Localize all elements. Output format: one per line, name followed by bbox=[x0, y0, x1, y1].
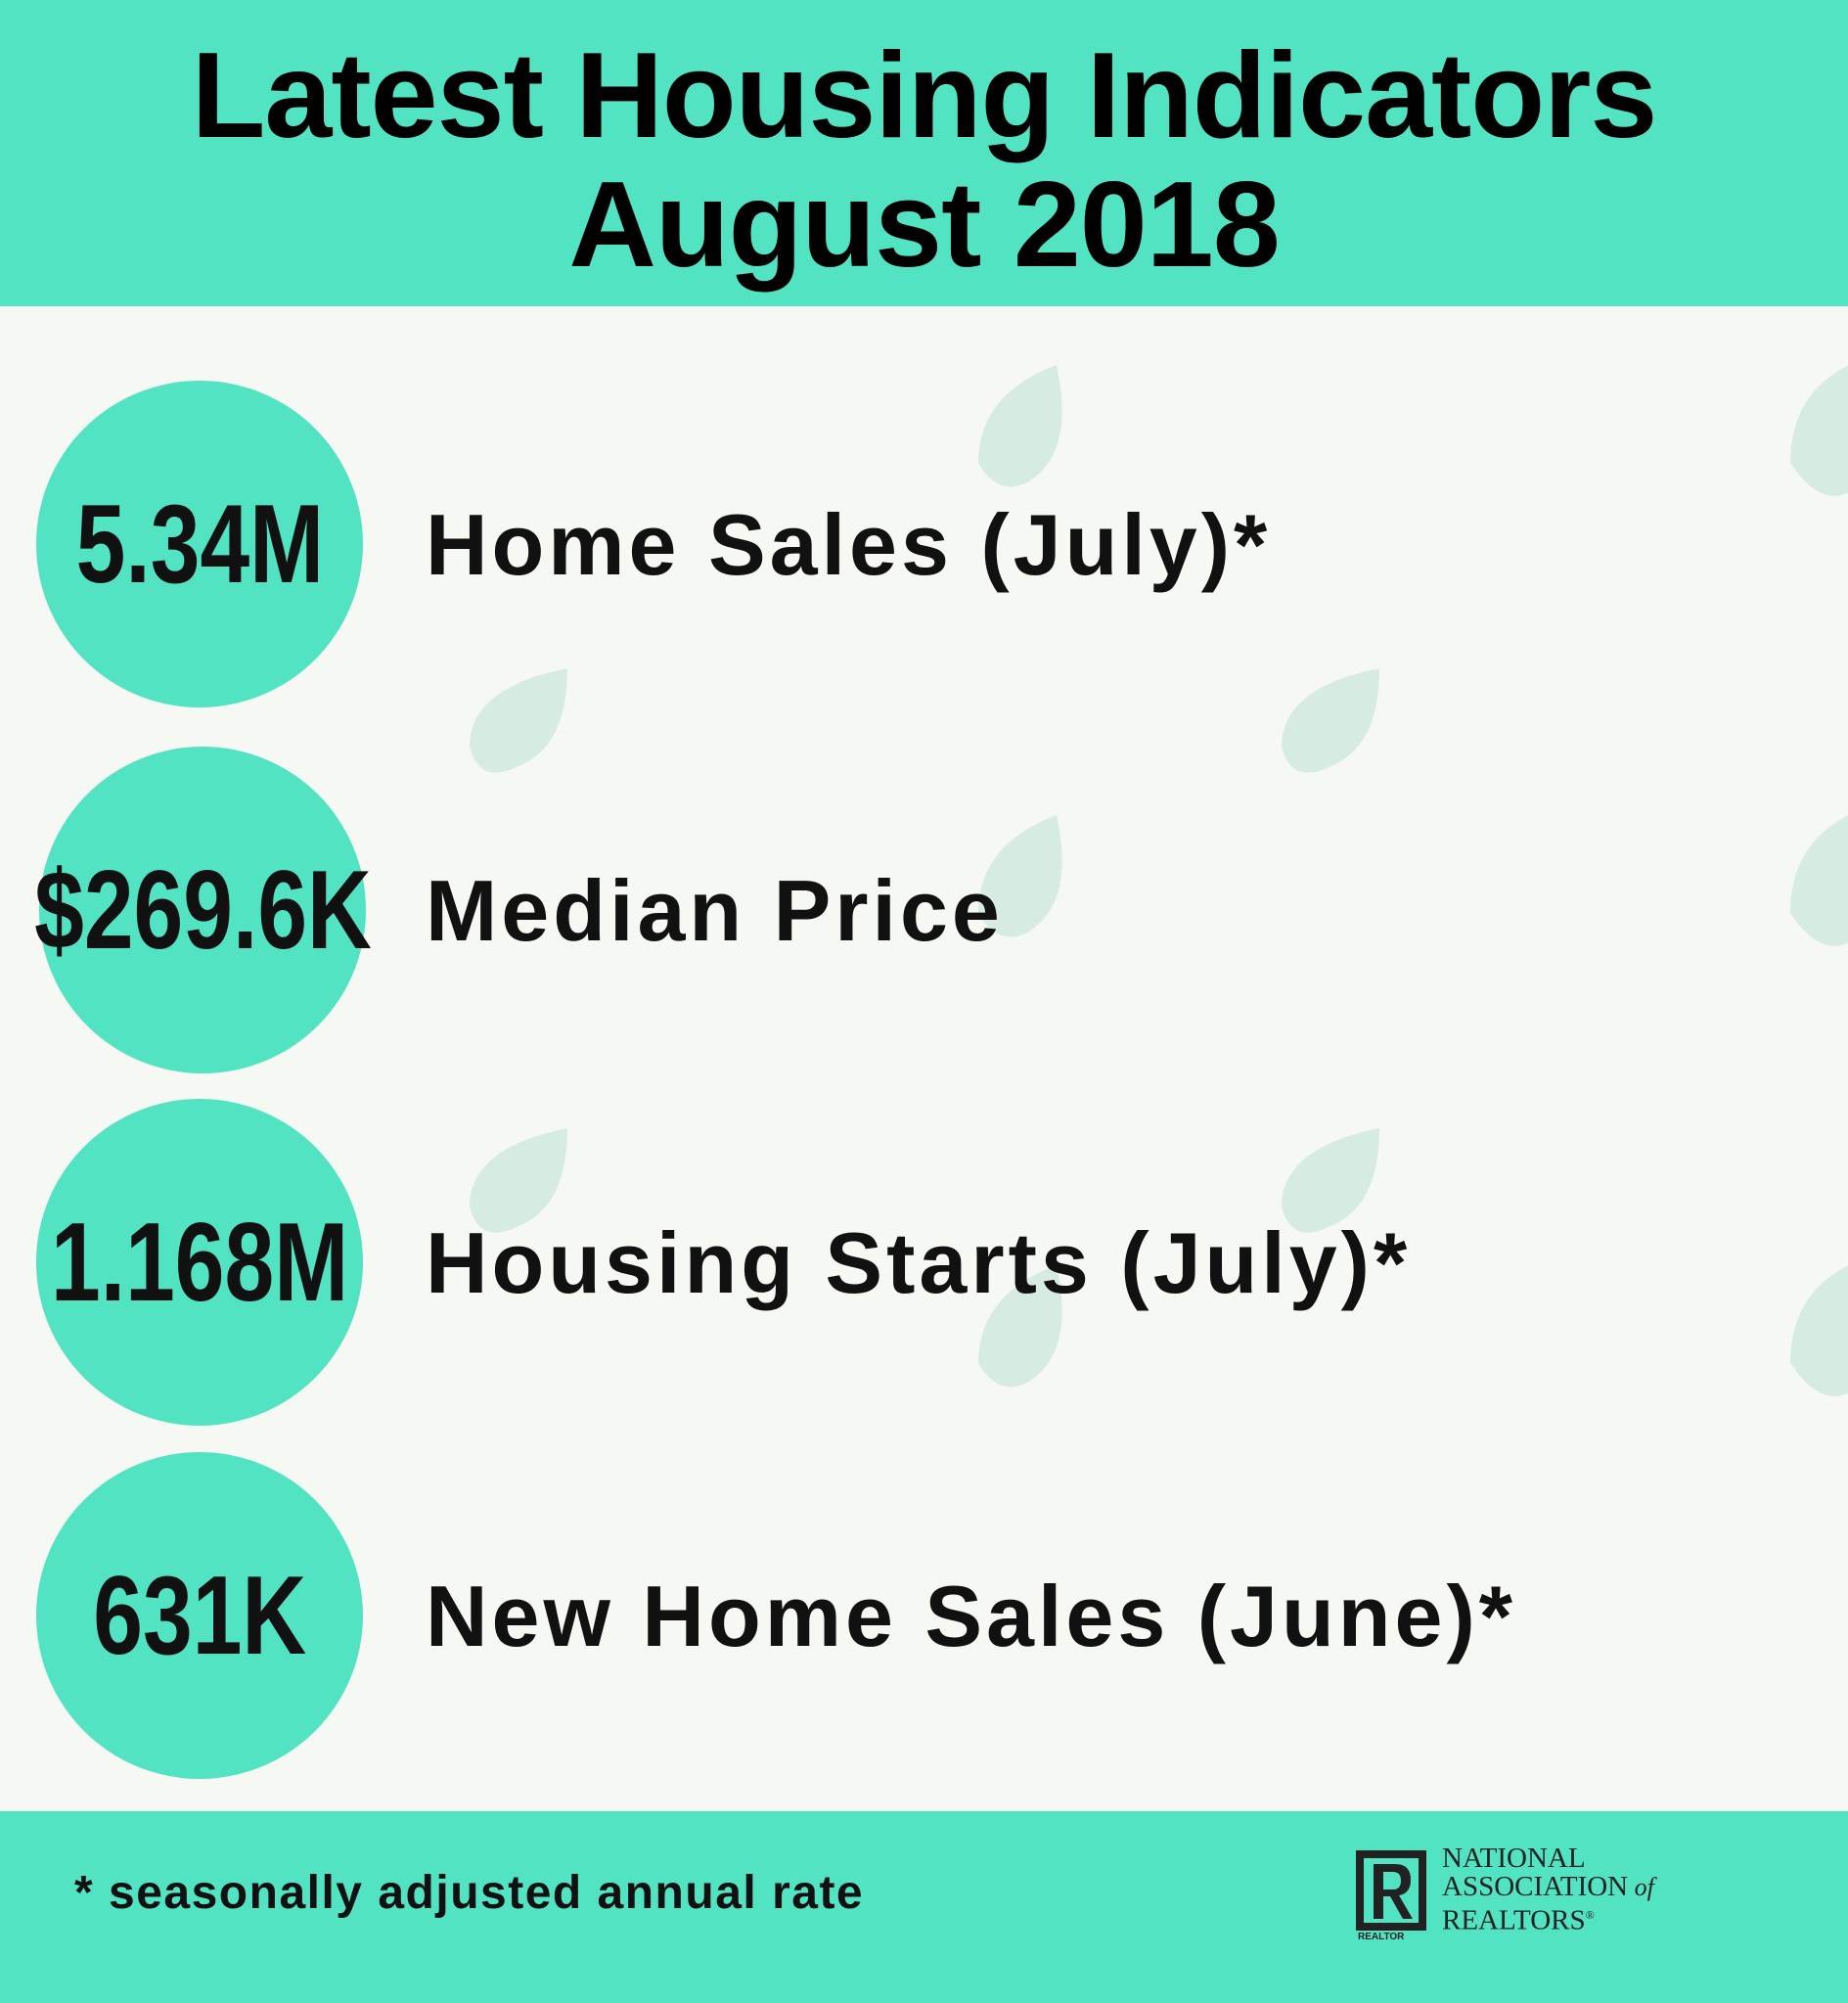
circle: 5.34M bbox=[36, 381, 363, 707]
circle: 5.34M: 5.34M bbox=[75, 481, 324, 607]
label: home sales: Home Sales (July)* bbox=[426, 496, 1271, 593]
indicator: new home sales bbox=[36, 1452, 1516, 1779]
logo text: NATIONAL bbox=[1442, 1843, 1586, 1874]
logo text: REALTORS® bbox=[1442, 1905, 1595, 1936]
icon: R block bbox=[1356, 1850, 1426, 1940]
header band bbox=[0, 0, 1848, 306]
circle: 1.168M: 1.168M bbox=[51, 1200, 348, 1325]
indicator: housing starts bbox=[36, 1099, 1411, 1426]
decorative leaves bbox=[470, 365, 1848, 1396]
label: new home sales: New Home Sales (June)* bbox=[426, 1568, 1516, 1664]
footnote: * seasonally adjusted annual rate bbox=[74, 1867, 864, 1919]
logo: National Association of Realtors bbox=[1356, 1843, 1657, 1940]
circle: $269.6K: $269.6K bbox=[34, 847, 371, 973]
circle: 631K bbox=[36, 1452, 363, 1779]
circle: 1.168M bbox=[36, 1099, 363, 1426]
indicator: median price bbox=[34, 747, 1004, 1073]
indicator: home sales bbox=[36, 381, 1271, 707]
footer band bbox=[0, 1811, 1848, 2003]
logo text bbox=[1442, 1843, 1657, 1936]
logo text: ASSOCIATION of bbox=[1442, 1871, 1654, 1902]
label: median price: Median Price bbox=[426, 862, 1004, 959]
label: housing starts: Housing Starts (July)* bbox=[426, 1214, 1411, 1311]
title line 1: Latest Housing Indicators bbox=[192, 28, 1656, 163]
title line 2: August 2018 bbox=[568, 158, 1280, 293]
circle: $269.6K bbox=[39, 747, 366, 1073]
circle: 631K: 631K bbox=[93, 1554, 306, 1677]
